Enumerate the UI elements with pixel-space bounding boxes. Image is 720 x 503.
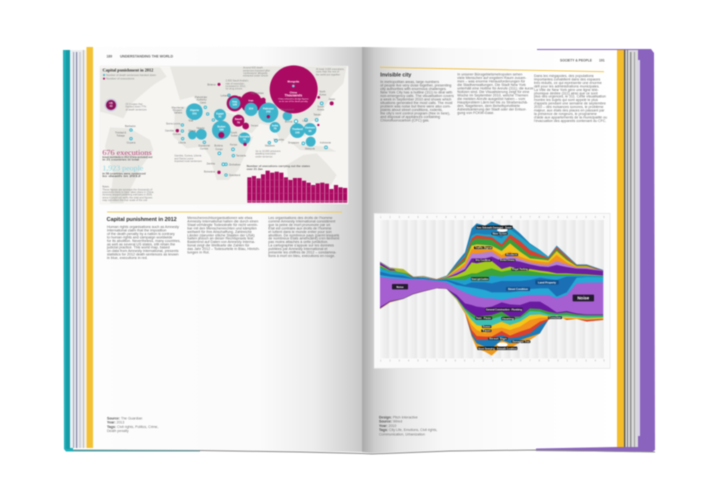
map country labels: Laos	[302, 119, 308, 122]
text block: German, left page: weltweit für ihre Abschaffung. Zahlreiche	[187, 230, 252, 234]
credits: left page: Source: The Guardian	[107, 416, 142, 420]
text block: German, left page: Amnesty International halten die durch einen	[187, 220, 258, 224]
key figure: 1,923 people: in 58 countries were sentenced	[102, 171, 146, 175]
text block: English, right page: non-emergency calls. The visualisation covers	[380, 94, 454, 98]
stream labels: Water System	[492, 231, 508, 235]
heading: invisible city: Invisible city	[380, 72, 411, 78]
text block: French, left page: État est contraire aux droits de l'homme	[268, 225, 332, 230]
map country labels: Korea	[317, 109, 325, 112]
map country labels: Sierra Leone	[166, 123, 181, 126]
stream labels: Illegal Parking	[512, 267, 528, 271]
text block: French, left page: tions à mort en bleu, exécutions en rouge.	[268, 254, 335, 258]
text block: German, left page: Staat verhängte Todesstrafe für nicht verein-	[187, 223, 259, 227]
stream labels: Blocked Driveway	[500, 258, 515, 262]
text block: French, left page: Les organisations des droits de l'homme	[268, 216, 333, 220]
map callouts: extracted under torture	[243, 75, 269, 78]
map callouts	[126, 67, 345, 163]
key figure: 676 executions	[102, 148, 153, 162]
stream labels: Street Sweeping - Sidewalk Condition	[478, 346, 517, 350]
stream labels: Heating	[502, 316, 514, 320]
text block: German, left page: halten jedoch an dieser Rechtspraxis fest.	[187, 237, 254, 241]
map country labels: Liberia	[178, 141, 186, 144]
map title and legend: Number of executions	[106, 77, 135, 80]
stream labels: New Sidewalk Damaged - Sewer	[477, 225, 512, 229]
text block: French, left page: abolition. De nombreux pays (parmi lesquels	[268, 233, 339, 237]
map title and legend: Number of death sentences handed down	[106, 74, 157, 77]
text block: French, left page: publiées par Amnesty International et	[268, 247, 327, 251]
text block: French, right page: La Ville de New York gère une ligne télé-	[534, 88, 599, 92]
stream labels: Street Condition	[508, 287, 528, 291]
map callouts: Of 3 states that	[126, 103, 143, 106]
bubble: United States: US	[109, 101, 113, 105]
credits: left page: Year: 2013	[107, 421, 124, 425]
text block: English, left page: of the death penalty by a nation is contrary	[107, 232, 175, 236]
right yellow edge stripe	[617, 50, 624, 447]
text block: German, right page: Notizen sind. Die Visualisierung zeigt für eine	[457, 90, 529, 94]
bubble: China: on its use of the death penalty	[279, 100, 309, 103]
text block: French, right page: défi pour les administrations municipales.	[534, 84, 600, 88]
map country labels: Ghana	[188, 129, 196, 132]
text block: German, left page: Menschenrechtsorganisationen wie etwa	[187, 216, 252, 220]
map country labels: Singapore	[288, 142, 300, 145]
map country labels: Nigeria	[197, 127, 205, 130]
bubble value labels: 129	[232, 103, 237, 107]
text block: German, right page: Woche im September 2010, welche Themen	[457, 94, 528, 98]
stream labels: Taxi	[482, 328, 491, 332]
left page edge stack	[66, 50, 86, 449]
right running header: SOCIETY & PEOPLE	[560, 58, 593, 62]
text block: English, right page: In metropolitan areas, large numbers	[380, 80, 439, 84]
stream labels: Damaged Tree	[512, 339, 530, 343]
map country labels: Burkina	[214, 145, 223, 148]
stream labels: Dirty Conditions	[475, 258, 491, 262]
text block: French, right page	[534, 74, 607, 123]
left yellow edge stripe	[86, 47, 93, 448]
back cover: purple	[536, 49, 655, 452]
text block: English, right page: situations generated the most calls. The most	[380, 101, 453, 105]
map country labels: Yemen	[251, 125, 259, 128]
map callouts: increased in 2012,	[226, 85, 246, 88]
text block: English, left page: in blue, executions in red.	[107, 256, 148, 260]
bubble value labels: 79	[237, 120, 240, 124]
map country labels: Bangladesh	[281, 109, 295, 112]
text block: English, right page	[380, 80, 454, 122]
text block: English, right page: a week in September 2010 and shows which	[380, 98, 451, 102]
map country labels: Belarus	[207, 83, 217, 86]
bubble: China: China refused to divulge figures	[278, 97, 308, 100]
map country labels: Malaysia	[305, 147, 315, 150]
bubble value labels: 153	[192, 111, 197, 115]
credits: left page: Death penalty	[107, 429, 129, 433]
key figure: 1,923 people: 1,923 people	[102, 163, 144, 172]
credits: right page: Communication, Urbanization	[379, 432, 425, 436]
magenta bubbles: executions	[218, 92, 266, 146]
text block: French, right page: 2010 – des nuisances sonores, le problème	[534, 105, 604, 109]
bubble: United States	[105, 99, 117, 111]
bubble: China: Mongolia	[288, 80, 300, 84]
stream labels: Street Light Condition	[472, 277, 489, 281]
map country labels: Maldives	[265, 145, 276, 148]
map country labels: Zimbabwe	[229, 163, 241, 166]
credits: right page: Source: Wired	[379, 420, 402, 424]
map country labels: Palestinian	[195, 96, 208, 99]
text block: French, right page: la présence de rongeurs, le programme	[534, 112, 597, 116]
map country labels: Sudan	[231, 135, 238, 138]
map land masses	[100, 67, 347, 203]
bubble: United States: 43	[110, 104, 113, 108]
bubble value labels: 86	[309, 129, 312, 133]
map country labels: Botswana	[204, 171, 216, 174]
map callouts: under sentence	[255, 155, 273, 158]
small magenta rings	[176, 83, 334, 174]
bubble: China: Thousands	[284, 94, 302, 98]
heading: capital punishment: Capital punishment in 2012	[107, 217, 177, 223]
stream labels: Rodent	[506, 252, 517, 256]
bubble value labels: 242	[266, 110, 271, 114]
bubble value labels	[190, 99, 316, 142]
credits: left page	[107, 416, 159, 433]
map country labels: Mali	[189, 120, 194, 123]
text block: French, right page: montre les sujets qui sont appelé le plus	[534, 98, 598, 102]
panel: streamgraph chart	[374, 213, 610, 368]
text block: French, right page: d'aide aux appartements de la municipalité ou	[534, 115, 607, 119]
left running header: UNDERSTANDING THE WORLD	[120, 54, 174, 58]
bar chart: US executions: Number of executions carrying out the states	[247, 164, 311, 168]
credits: right page: Year: 2010	[379, 424, 396, 428]
bubble value labels: Somalia	[239, 135, 250, 139]
text block: English, left page: Human rights organisations such as Amnesty	[107, 225, 179, 229]
book spread	[63, 46, 655, 454]
map country labels: Western	[173, 109, 182, 112]
text block: German, right page: Asbestsanierung der Stadt oder der Entsor-	[457, 108, 527, 112]
map callouts: Gambia, Guinea, Liberia	[174, 155, 202, 158]
map country labels: Authority	[197, 99, 207, 102]
text block: English, left page: to human rights and campaign worldwide	[107, 235, 172, 239]
text block: German, right page: die Stadtverwaltungen. Die Stadt New York	[457, 83, 526, 87]
map callouts: imposed most sentences	[174, 160, 203, 163]
map callouts: 2,600 Saudi Arabia's	[226, 80, 249, 83]
text block: French, left page: présente les chiffres de 2012 – condamna-	[268, 250, 337, 254]
stream labels: Land Property	[538, 280, 557, 284]
left page	[93, 46, 362, 452]
stream labels: Traffic Signal	[475, 245, 492, 249]
stream labels: Street Sign	[489, 336, 507, 340]
text block: German, right page	[457, 72, 534, 115]
text block: German, left page: das Jahr 2012 – Todesurteile in Blau, Hinrich-	[187, 247, 261, 251]
bubble value labels: 106	[295, 130, 300, 134]
right page	[362, 47, 617, 453]
text block: French, right page: d'appels pendant une semaine de septembre	[534, 102, 606, 106]
text block: French, left page	[268, 216, 339, 258]
map country labels: Japan	[328, 98, 336, 101]
credits: right page: Design: Pitch Interactive	[379, 416, 418, 420]
right page edge stack	[624, 50, 640, 447]
map callouts: more than the rest of	[316, 71, 339, 74]
text block: French, right page: l'évacuation des appareils contenant du CFC.	[534, 119, 606, 123]
text block: English, left page: on data from Amnesty International, presents	[107, 249, 179, 253]
map callouts: 'confessions' allegedly	[243, 72, 268, 75]
text block: English, right page: and disposal of appliances containing	[380, 115, 440, 119]
map notes: Amnesty stopped publishing estimates in 2009,	[102, 194, 153, 197]
bubble value labels: Iraq	[232, 100, 237, 104]
map country labels: Taiwan	[313, 114, 322, 117]
text block: English, right page: problem was noise but there were also com-	[380, 104, 452, 108]
map notes: since it could not verify the total and figures	[102, 196, 153, 199]
map country labels: Burma	[285, 121, 293, 124]
credits: right page	[379, 416, 437, 436]
map title and legend	[103, 69, 157, 80]
map country labels: Guinea	[200, 148, 209, 151]
stream labels: General Construction - Plumbing	[486, 307, 522, 311]
bubble value labels: Egypt	[216, 111, 224, 115]
map country labels: South	[317, 106, 324, 109]
bubble value labels: 199	[219, 128, 224, 132]
bubble value labels: 314	[249, 106, 254, 110]
map country labels: Guyana	[127, 141, 136, 144]
hour ticks: bottom: 1234567890123456789012345	[380, 361, 605, 363]
key figure: 676 executions: in 21 countries in total	[102, 158, 139, 162]
text block: German, right page: unterhält eine Hotline für Anrufe (311); die kurze	[457, 86, 534, 90]
bubble value labels: Thailand	[292, 127, 303, 131]
map country labels: Kenya	[230, 143, 238, 146]
text block: German, right page: viele Menschen auf engstem Raum zusam-	[457, 76, 527, 80]
text block: French, left page: La cartographie s'appuie sur les données	[268, 244, 334, 248]
text block: German, right page: Hauptproblem Lärm bei bis zu Straßenschä-	[457, 100, 529, 104]
map notes: Notes	[102, 185, 110, 188]
stream labels	[392, 225, 594, 350]
map country labels: Afghanistan	[251, 92, 264, 95]
map country labels: Indonesia	[320, 142, 331, 145]
stream labels: Noise	[396, 285, 404, 289]
bubble value labels: Iran	[249, 99, 254, 103]
bubble value labels: Pakistan	[263, 106, 274, 110]
map notes: executions likely to have taken place in China.	[102, 191, 154, 194]
map notes: These figures are amongst the thousands of	[102, 188, 153, 191]
yellow rule: right page	[380, 67, 604, 72]
text block: English, left page: statistics for 2012 death sentences as known	[107, 253, 179, 257]
text block: English, right page: of people live very close together, presenting	[380, 84, 451, 88]
stream labels: Paint - Plaster	[476, 316, 491, 320]
text block: German, right page: den, Nagetieren, dem Behelfsprivilbiete	[457, 104, 520, 108]
text block: French, left page: que la peine de mort prononcée par un	[268, 223, 330, 227]
key figure: 1,923 people	[102, 163, 146, 178]
bubble value labels: 76	[243, 138, 246, 142]
bubble: China	[270, 65, 318, 113]
bubble value labels: Saudi	[235, 117, 242, 121]
bottom page edge shadow	[73, 450, 655, 454]
bar chart: US executions: over 21 Jan	[247, 167, 263, 171]
text block: German, left page: tungen in Rot.	[187, 250, 210, 254]
map country labels: Trinidad &	[115, 132, 127, 135]
stream labels: Noise	[577, 295, 590, 300]
map callouts: Around 600 death	[243, 67, 263, 70]
bubble value labels: 78	[274, 127, 277, 131]
map country labels: Sahara	[174, 112, 183, 115]
text block: French, right page: très réduits, ce qui représente une énorme	[534, 81, 602, 85]
text block: French, right page: importantes cohabitent dans des espaces	[534, 78, 601, 82]
credits: right page: Tags: City Life, Emotions, Civil rights,	[379, 428, 437, 432]
text block: German, left page: tional zeigt die Weltkarte die Zahlen für	[187, 244, 250, 248]
map callouts: for drug crimes	[226, 88, 243, 91]
bubble value labels: Sudan	[217, 124, 226, 128]
bar chart: US executions	[247, 164, 347, 203]
map country labels: Equatorial	[199, 145, 210, 148]
back cover: teal	[63, 50, 200, 452]
bubble: China: China	[290, 91, 298, 95]
text block: English, right page: the city's rent control program (free in here),	[380, 112, 450, 116]
bubble value labels: 91	[219, 114, 222, 118]
text block: German, right page: men – was enorme Herausforderungen für	[457, 80, 526, 84]
text block: French, left page: comme Amnesty International considèrent	[268, 220, 335, 224]
text block: French, left page: de nombreux États américains) s'en tiennent	[268, 236, 339, 241]
text block: English, left page	[106, 225, 181, 260]
bubble value labels: India	[272, 124, 279, 128]
map country labels: Swaziland	[229, 174, 241, 177]
column stripes	[380, 220, 604, 358]
map notes	[102, 185, 154, 202]
map country labels: South	[231, 132, 238, 135]
small country rings	[130, 94, 327, 176]
map callouts: sentences imposed after	[243, 69, 270, 72]
map country labels: Guinea	[173, 133, 181, 136]
right running header: 191	[599, 58, 605, 62]
map callouts: and Sierra Leone	[174, 157, 194, 160]
text block: French, right page: majeur, aux états des places en passant par	[534, 108, 605, 112]
map country labels: Congo	[215, 148, 223, 151]
map country labels: Tobago	[117, 135, 125, 138]
text block: English, right page: New York City has a hotline (311) to deal with	[380, 90, 452, 94]
teal bubbles over executions	[229, 98, 292, 123]
text block: German, right page: In unserer Bürogebietsmetropolen sehen	[457, 72, 522, 76]
teal bubbles: death sentences	[186, 103, 316, 147]
map country labels: Gambia	[165, 129, 174, 132]
map country labels: Korea	[319, 93, 327, 96]
text block: English, left page: as well as several US states, still retain the	[107, 242, 175, 246]
text block: French, left page: et luttent dans le monde entier pour son	[268, 230, 332, 234]
map callouts: Up to 10,000 prisoners	[255, 150, 281, 153]
map title and legend: Capital punishment in 2012	[103, 69, 154, 73]
text block: German, right page: gung von FCKW-Gase.	[457, 111, 494, 115]
map callouts: rate of execution	[226, 82, 245, 85]
text block: German, right page: die meisten Anrufe ausgelöst haben – vom	[457, 97, 525, 101]
text block: German, left page: Basierend auf Daten von Amnesty Interna-	[187, 240, 256, 244]
map country labels: Zambia	[207, 163, 216, 166]
text block: English, left page: International claim that the imposition	[107, 228, 166, 232]
hour ticks: top: 1234567890123456789012345	[380, 217, 605, 219]
bubble value labels: Algeria	[190, 108, 199, 112]
text block: English, right page: city authorities with enormous challenges.	[380, 87, 447, 91]
text block: English, left page: for its abolition. Nevertheless, many countries,	[107, 239, 181, 243]
text block: German, left page	[187, 216, 261, 254]
text block: German, left page: bar mit den Menschenrechten und kämpfen	[187, 226, 257, 230]
text block: French, right page: phonique dédiée (311) ainsi que ce sont	[534, 91, 598, 95]
text block: French, right page: Dans les mégapoles, des populations	[534, 74, 594, 78]
map callouts: At least 3,000 executions,	[316, 68, 345, 71]
text block: English, right page: plaints about street conditions, rodents,	[380, 108, 443, 112]
key figure: 676 executions: 676 executions	[102, 148, 152, 157]
map callouts: the world put together	[316, 73, 340, 76]
map country labels: Gaza	[200, 101, 207, 104]
map notes: may not reflect the true scale of the use	[102, 199, 148, 202]
left running header: 189	[106, 54, 112, 58]
key figure: 1,923 people: to death in 2012	[102, 174, 142, 178]
text block: English, left page: judicial practice. This world map, based	[106, 246, 170, 250]
map country labels: Mauritania/	[172, 106, 184, 109]
text block: French, left page: pas moins attachés à cette juridiction.	[268, 240, 328, 244]
key figure: 676 executions: known worldwide in 2012 (China excluded) and	[102, 155, 153, 159]
map country labels: Lebanon	[221, 95, 231, 98]
stream labels: Sewer	[483, 324, 491, 328]
yellow rule: left page	[107, 211, 342, 213]
panel: capital punishment map	[100, 65, 348, 204]
text block: English, right page: Chlorofluorocarbon (CFC) gas.	[380, 118, 429, 122]
map callouts: handed down 77%	[126, 106, 147, 109]
map country labels: Sri Lanka	[273, 139, 284, 142]
credits: left page: Tags: Civil rights, Politics, Crime,	[107, 425, 159, 429]
map country labels: North	[319, 91, 326, 94]
map country labels	[115, 83, 336, 177]
map callouts: awaiting execution	[255, 153, 276, 156]
stream labels: Consumer	[549, 315, 561, 319]
map callouts: of death sentences	[126, 108, 147, 111]
stream layers	[377, 218, 607, 362]
map country labels: Tanzania	[236, 155, 247, 158]
bubble value labels: Vietnam	[305, 126, 316, 130]
map country labels: Barbados	[125, 125, 136, 128]
text block: French, right page: plus des urgences, le 311. Cette visualisation	[534, 95, 606, 99]
text block: German, left page: Länder (darunter etliche Staaten der USA)	[187, 233, 255, 237]
